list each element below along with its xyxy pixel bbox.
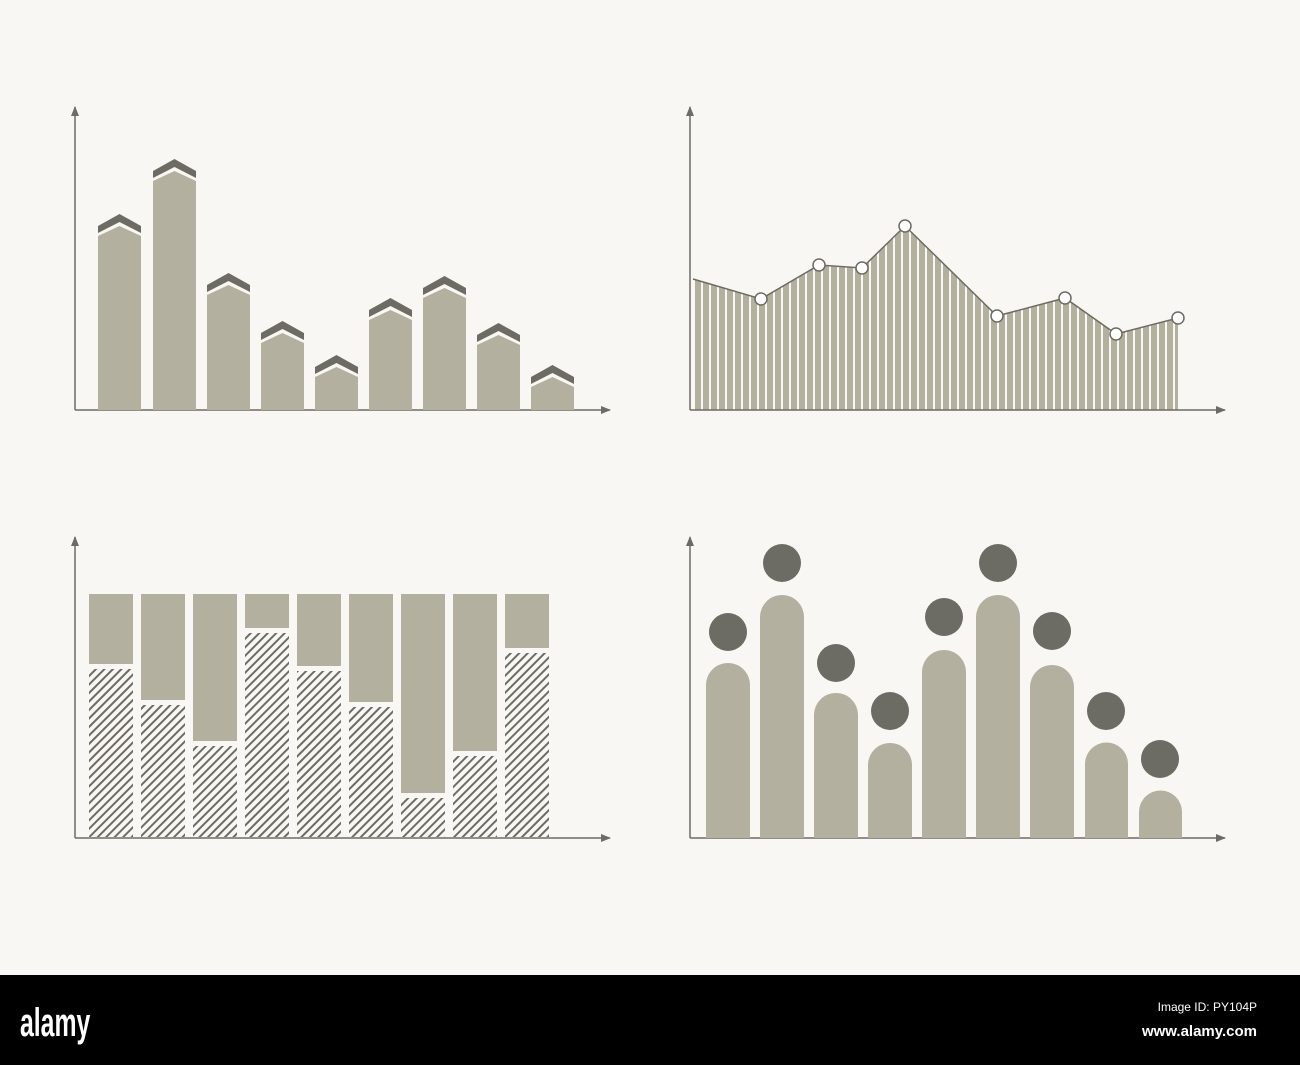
chart: rounded bars with dots	[690, 537, 1225, 838]
axes	[75, 537, 610, 838]
line	[693, 226, 1178, 334]
bars	[706, 595, 1182, 838]
points	[755, 220, 1184, 340]
axes	[690, 537, 1225, 838]
footer url: www.alamy.com	[1141, 1023, 1257, 1040]
bars	[89, 594, 549, 837]
chart: chevron bar chart	[75, 107, 610, 410]
footer image id: Image ID: PY104P	[1158, 1000, 1257, 1014]
chart: stacked hatched bars	[75, 537, 610, 838]
chart: striped area line chart	[690, 107, 1225, 410]
footer bar	[0, 975, 1300, 1065]
dots	[709, 544, 1179, 778]
axes	[75, 107, 610, 410]
bars	[98, 159, 574, 410]
area	[693, 226, 1178, 410]
axes	[690, 107, 1225, 410]
footer logo: alamy	[20, 1001, 91, 1046]
